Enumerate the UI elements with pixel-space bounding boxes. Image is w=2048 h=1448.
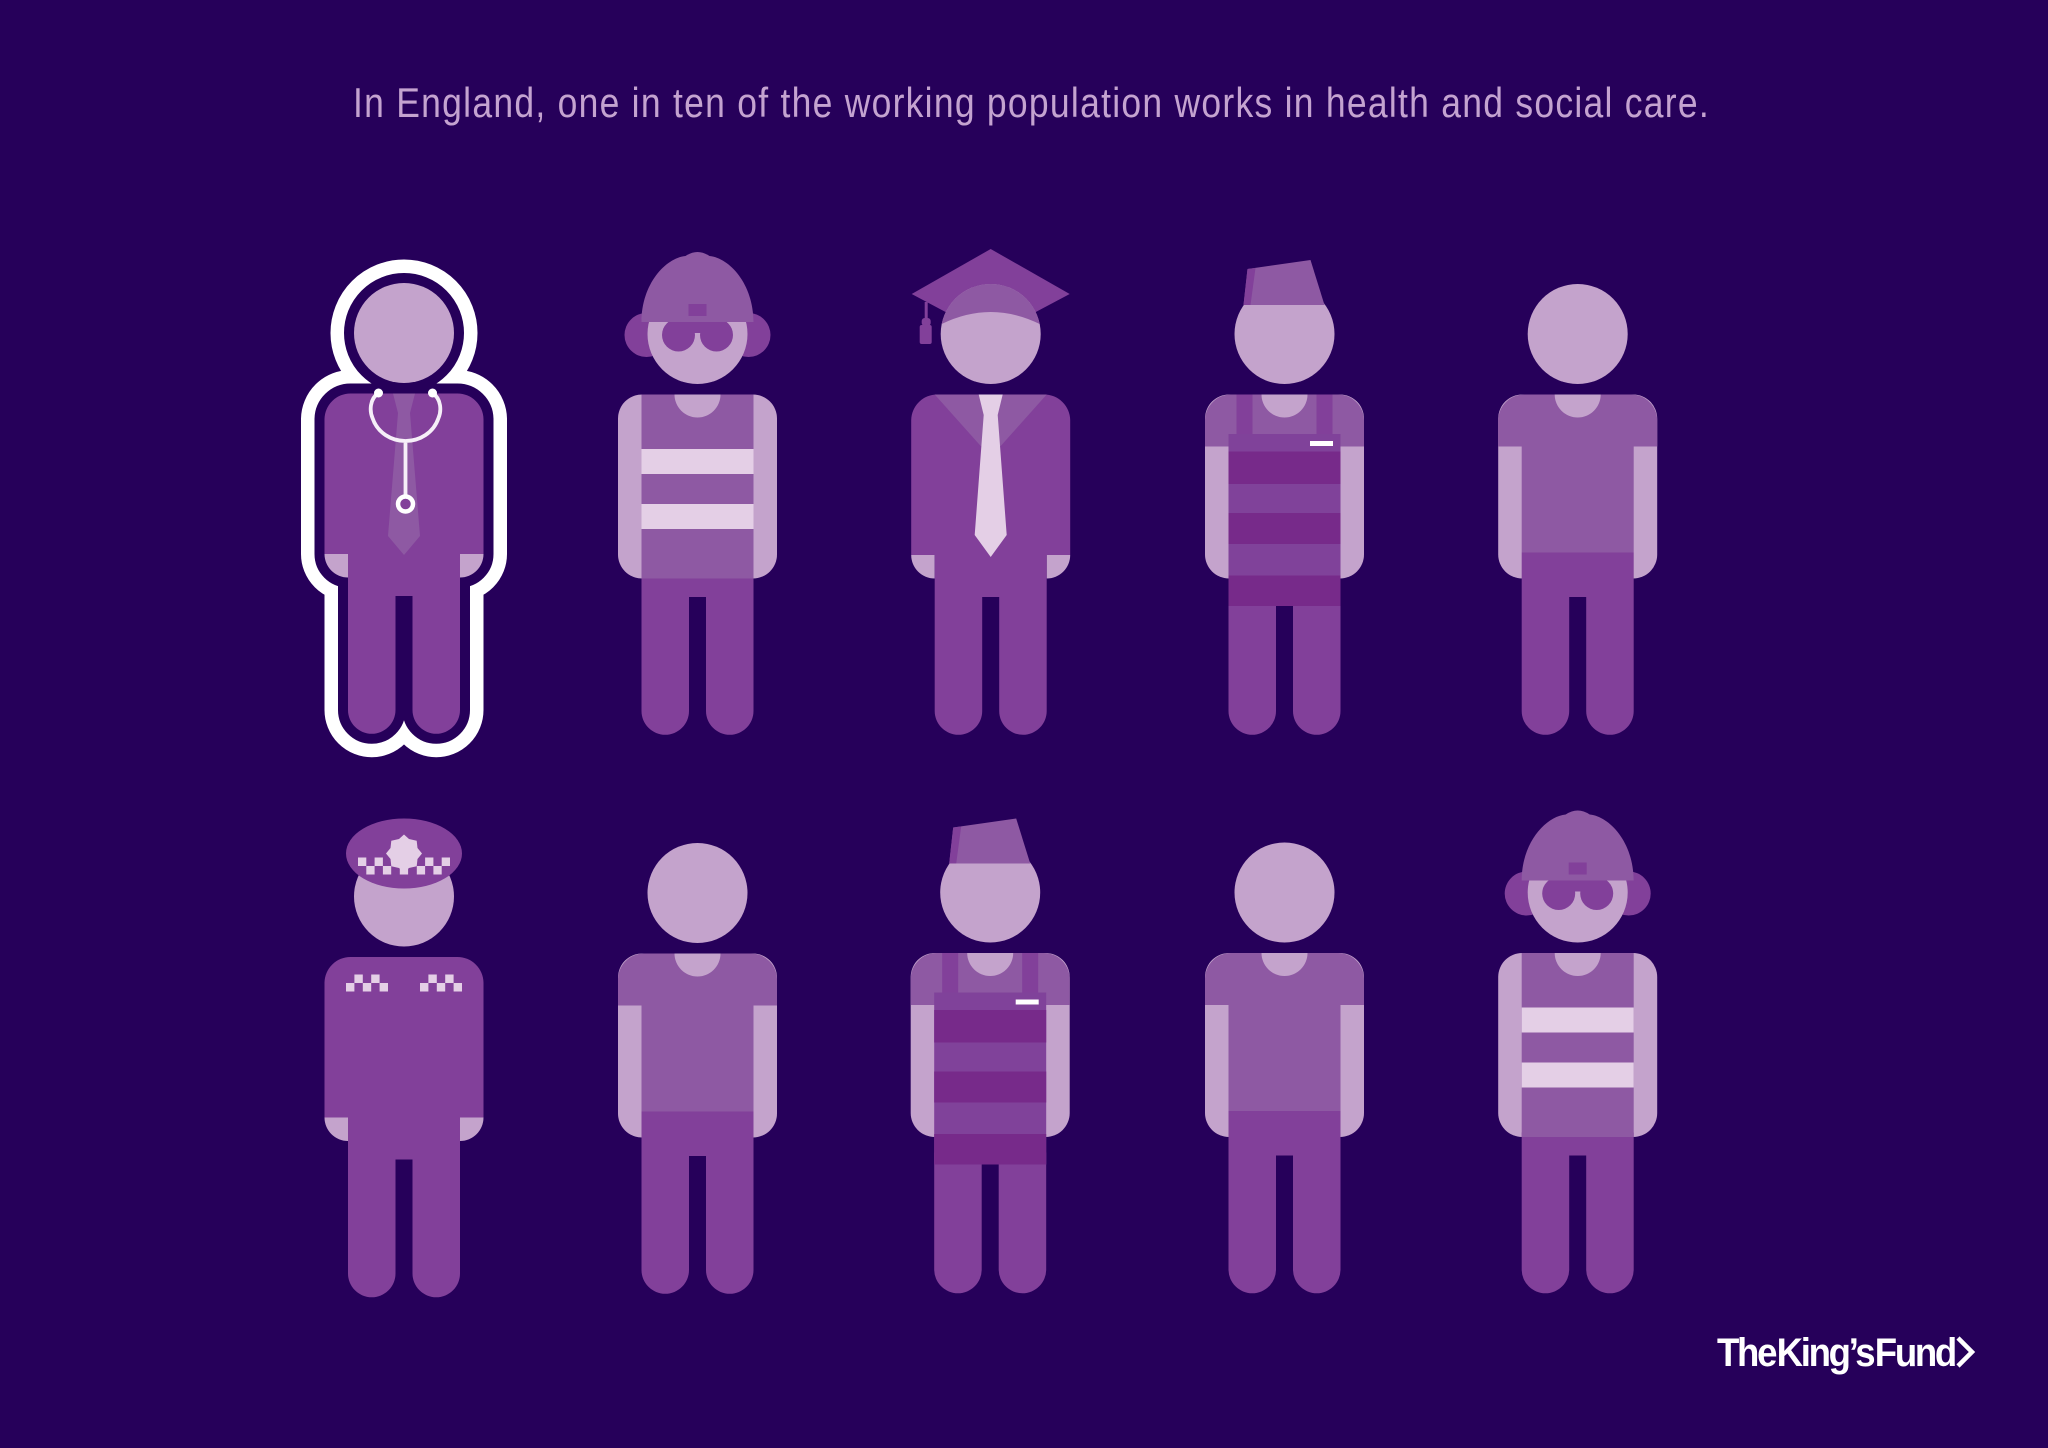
title: In England, one in ten of the working population works in health and social care.: [353, 79, 1710, 126]
shirt: [1205, 953, 1364, 1111]
cap: [1244, 260, 1324, 305]
neck: [674, 394, 720, 418]
shirt: [1498, 394, 1657, 552]
apron straps: [942, 953, 1038, 993]
arms: [911, 953, 1070, 1137]
epaulettes: [346, 974, 462, 992]
arms: [1205, 953, 1364, 1137]
apron straps: [1236, 394, 1332, 434]
head: [1234, 842, 1334, 942]
figure: construction worker row 2: [1498, 810, 1657, 1293]
vest: [1522, 953, 1634, 1137]
arms: [1205, 394, 1364, 578]
suit and legs: [911, 394, 1070, 735]
head: [1528, 284, 1628, 384]
apron: [934, 992, 1046, 1164]
head: [941, 284, 1041, 384]
tie: [975, 394, 1007, 557]
uniform and legs: [324, 957, 484, 1297]
legs: [642, 574, 754, 735]
cap: [949, 818, 1030, 864]
lapels: [935, 394, 1047, 446]
head: [354, 846, 454, 946]
head: [648, 284, 748, 384]
head: [1234, 284, 1334, 384]
figure: police officer: [324, 818, 484, 1297]
hands: [324, 1118, 484, 1141]
arms: [618, 394, 777, 578]
neck: [1555, 953, 1601, 976]
hard hat: [1522, 810, 1634, 880]
hat badge: [1569, 862, 1587, 874]
tassel: [920, 302, 932, 344]
reflective stripes: [642, 449, 754, 529]
neck: [967, 953, 1013, 976]
ear defenders: [1505, 872, 1651, 916]
reflective stripes: [1522, 1008, 1634, 1088]
figure: plain person row 1: [1498, 284, 1657, 735]
legs: [1228, 594, 1340, 735]
legs: [1228, 1111, 1340, 1293]
hard hat: [642, 252, 754, 322]
neck: [1555, 394, 1601, 418]
vest: [642, 394, 754, 578]
legs: [642, 1112, 754, 1294]
tie: [388, 394, 420, 555]
police cap: [346, 818, 462, 888]
figure: plain person row 2 column 2: [618, 843, 777, 1294]
stethoscope: [371, 388, 440, 512]
pocket bar: [1310, 441, 1333, 446]
head: [1528, 842, 1628, 942]
hands: [324, 554, 484, 578]
neck: [674, 954, 720, 976]
goggles: [662, 318, 733, 352]
ear defenders: [624, 313, 770, 357]
shirt: [1205, 394, 1364, 446]
neck: [1262, 953, 1308, 976]
shirt: [618, 954, 777, 1112]
legs: [934, 1152, 1046, 1293]
arms: [1498, 953, 1657, 1137]
cap star badge: [386, 834, 422, 872]
figure: graduate: [911, 249, 1070, 735]
figure: plain person row 2 column 4: [1205, 842, 1364, 1293]
hands: [911, 555, 1070, 578]
figure: doctor highlighted: [324, 283, 484, 734]
hat badge: [688, 304, 706, 316]
neck: [1262, 394, 1308, 418]
cap checker band: [358, 858, 450, 874]
pocket bar: [1016, 1000, 1039, 1004]
apron: [1228, 434, 1340, 606]
figure: apron worker row 2: [911, 818, 1070, 1293]
white outline: [324, 283, 484, 734]
legs: [1522, 552, 1634, 735]
suit and legs: [324, 394, 484, 734]
arms: [1498, 394, 1657, 578]
figure: apron worker row 1: [1205, 260, 1364, 735]
legs: [1522, 1132, 1634, 1293]
arms: [618, 954, 777, 1138]
head: [940, 842, 1040, 942]
mortarboard: [912, 249, 1070, 336]
cap dome: [942, 284, 1040, 324]
goggles: [1542, 877, 1613, 910]
head: [648, 843, 748, 943]
head: [354, 283, 454, 383]
logo: The King's Fund: The King’s Fund: [1717, 1331, 1955, 1375]
shirt: [911, 953, 1070, 1005]
figure: construction worker row 1: [618, 252, 777, 735]
